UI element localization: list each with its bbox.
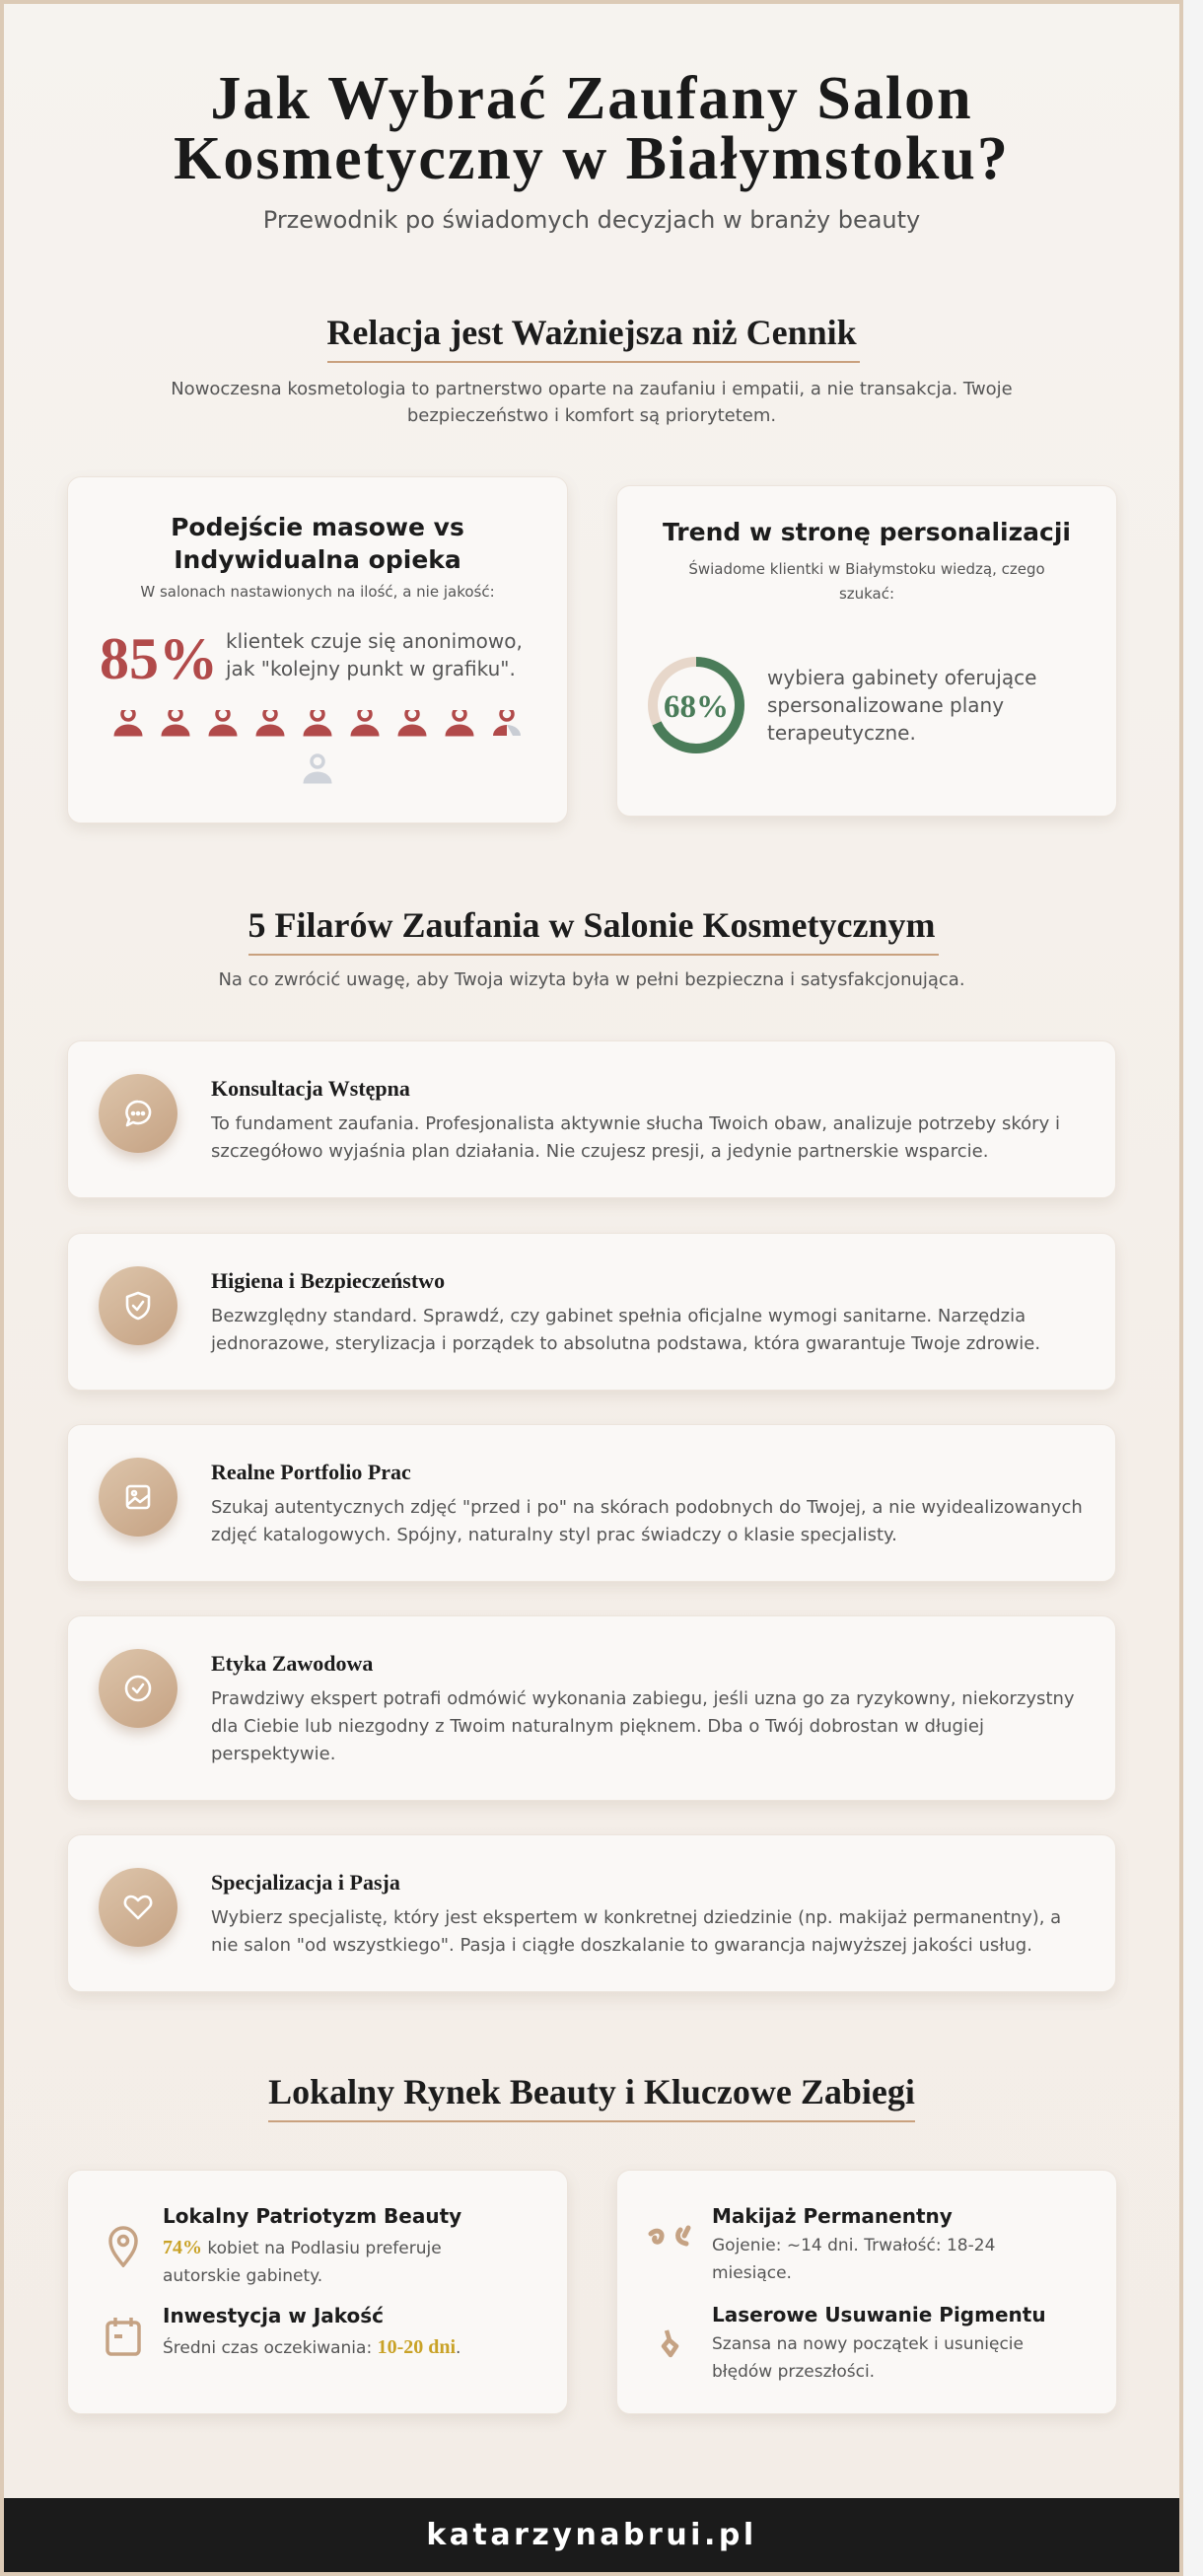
stat text: klientek czuje się anonimowo, [226, 629, 523, 653]
pillar title: Specjalizacja i Pasja [211, 1870, 400, 1895]
heading: local market: Lokalny Rynek Beauty i Kluczowe Zabiegi [268, 2072, 915, 2111]
icon: brows [649, 2225, 690, 2247]
intro paragraph: bezpieczeństwo i komfort są priorytetem. [407, 405, 776, 426]
icon: chat [99, 1074, 177, 1153]
icon: calendar [106, 2318, 141, 2356]
pillar text: Wybierz specjalistę, który jest ekspertem w konkretnej dziedzinie (np. makijaż permanentny), a [211, 1907, 1061, 1928]
pillar text: jednorazowe, sterylizacja i porządek to absolutna podstawa, która gwarantuje Twoje zdrowie. [211, 1333, 1040, 1354]
pillar 4 [67, 1615, 1116, 1801]
icon: heart [99, 1868, 177, 1947]
title [174, 65, 1010, 192]
subtitle: Przewodnik po świadomych decyzjach w branży beauty [263, 206, 920, 234]
pillar text: To fundament zaufania. Profesjonalista aktywnie słucha Twoich obaw, analizuje potrzeby skóry i [211, 1113, 1060, 1134]
pillar title: Etyka Zawodowa [211, 1651, 373, 1676]
pillar title: Higiena i Bezpieczeństwo [211, 1268, 445, 1293]
item title: Makijaż Permanentny [712, 2204, 953, 2228]
card heading [171, 513, 464, 574]
item text [712, 2334, 1024, 2382]
item text: 74% kobiet na Podlasiu preferuje [163, 2237, 442, 2258]
card subtext: Świadome klientki w Białymstoku wiedzą, czego [688, 560, 1045, 578]
intro paragraph [171, 379, 1013, 426]
item title: Lokalny Patriotyzm Beauty [163, 2204, 461, 2228]
card heading: Trend w stronę personalizacji [663, 518, 1071, 546]
title: Kosmetyczny w Białymstoku? [174, 125, 1010, 192]
item text: błędów przeszłości. [712, 2362, 875, 2382]
card heading: Podejście masowe vs [171, 513, 464, 541]
donut chart 68% [648, 657, 744, 753]
pillar text: Prawdziwy ekspert potrafi odmówić wykonania zabiegu, jeśli uzna go za ryzykowny, niekorzystny [211, 1688, 1075, 1709]
pillar text: szczegółowo wyjaśnia plan działania. Nie czujesz presji, a jedynie partnerskie wsparcie. [211, 1141, 988, 1162]
donut text: spersonalizowane plany [767, 693, 1004, 717]
heading: relacja: Relacja jest Ważniejsza niż Cennik [326, 313, 857, 352]
item text [712, 2236, 995, 2283]
item text: miesiące. [712, 2263, 792, 2283]
panel: personalization trend [616, 485, 1117, 817]
stat text [225, 629, 523, 680]
donut text [767, 666, 1036, 745]
pillar title: Konsultacja Wstępna [211, 1076, 410, 1101]
item title: Inwestycja w Jakość [163, 2304, 384, 2327]
pillar text: perspektywie. [211, 1744, 335, 1764]
icon: location pin [108, 2226, 138, 2267]
pillar text: zdjęć katalogowych. Spójny, naturalny styl prac świadczy o klasie specjalisty. [211, 1525, 897, 1545]
item text: autorskie gabinety. [163, 2266, 322, 2286]
pillars subtitle: Na co zwrócić uwagę, aby Twoja wizyta była w pełni bezpieczna i satysfakcjonująca. [218, 969, 965, 990]
people icons [114, 710, 521, 783]
card subtext: W salonach nastawionych na ilość, a nie jakość: [140, 583, 495, 601]
pillar text [211, 1688, 1075, 1764]
stat text: jak "kolejny punkt w grafiku". [226, 657, 516, 680]
donut text: wybiera gabinety oferujące [767, 666, 1036, 689]
pillar 3 [67, 1424, 1116, 1582]
footer [4, 2498, 1179, 2572]
footer: katarzynabrui.pl [426, 2518, 757, 2552]
card heading: Indywidualna opieka [174, 545, 461, 574]
pillar text [211, 1113, 1060, 1162]
pillar text [211, 1497, 1083, 1545]
panel: mass vs individual [67, 476, 568, 823]
stat 85%: 85% [100, 626, 218, 691]
pillar text: Bezwzględny standard. Sprawdź, czy gabinet spełnia oficjalne wymogi sanitarne. Narzędzia [211, 1306, 1026, 1326]
pillar text: nie salon "od wszystkiego". Pasja i ciągłe doszkalanie to gwarancja najwyższej jakości usług. [211, 1935, 1032, 1956]
card subtext: szukać: [839, 585, 894, 603]
panel: key treatments [616, 2170, 1117, 2414]
pillar text [211, 1907, 1061, 1956]
donut chart 68%: 68% [664, 689, 729, 725]
pillar text: Szukaj autentycznych zdjęć "przed i po" na skórach podobnych do Twojej, a nie wyidealizowanych [211, 1497, 1083, 1518]
pillar 5 [67, 1834, 1116, 1992]
icon: shield [99, 1266, 177, 1345]
pillar 2 [67, 1233, 1116, 1391]
pillar 1 [67, 1040, 1116, 1198]
panel: local stats [67, 2170, 568, 2414]
pillar text: dla Ciebie lub niezgodny z Twoim naturalnym pięknem. Dba o Twój dobrostan w długiej [211, 1716, 984, 1737]
item text: Szansa na nowy początek i usunięcie [712, 2334, 1024, 2354]
title: Jak Wybrać Zaufany Salon [210, 65, 973, 132]
card subtext [688, 560, 1045, 603]
item text: Gojenie: ~14 dni. Trwałość: 18-24 [712, 2236, 995, 2255]
icon: pen [661, 2329, 678, 2357]
icon: check [99, 1649, 177, 1728]
heading: 5 pillars: 5 Filarów Zaufania w Salonie Kosmetycznym [248, 905, 935, 945]
donut text: terapeutyczne. [767, 721, 916, 745]
pillar text [211, 1306, 1040, 1354]
item text: Średni czas oczekiwania: 10-20 dni. [163, 2336, 460, 2358]
icon: image [99, 1458, 177, 1537]
intro paragraph: Nowoczesna kosmetologia to partnerstwo oparte na zaufaniu i empatii, a nie transakcja. Twoje [171, 379, 1013, 399]
item text [163, 2237, 442, 2286]
item title: Laserowe Usuwanie Pigmentu [712, 2303, 1046, 2326]
pillar title: Realne Portfolio Prac [211, 1460, 411, 1484]
